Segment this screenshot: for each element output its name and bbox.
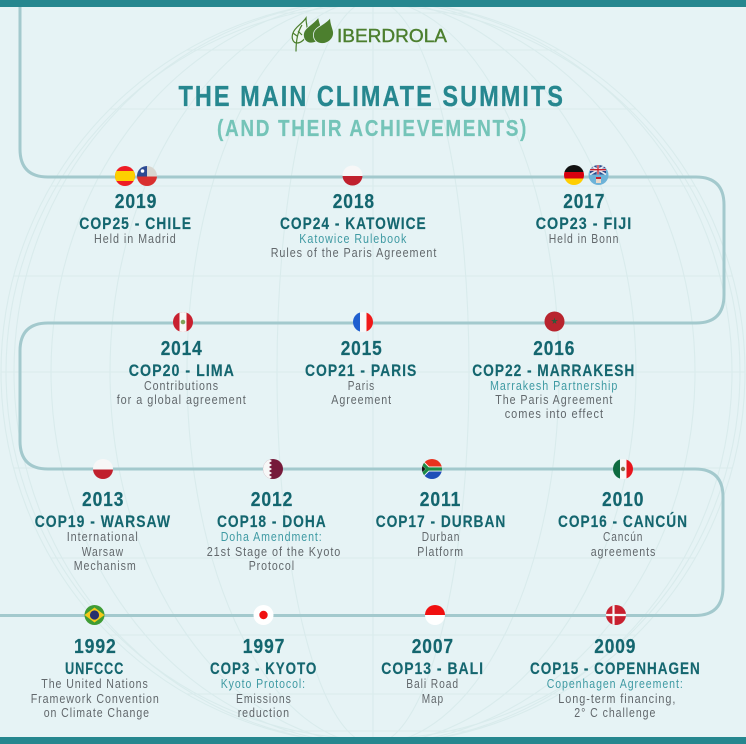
summit: COP19 Warsaw 2013: COP19 - WARSAW: [35, 512, 171, 531]
summit: COP19 Warsaw 2013: 2013: [82, 489, 124, 511]
summit: COP25 Chile 2019: [79, 166, 192, 246]
summit: COP23 Fiji 2017: 2017: [563, 191, 605, 213]
summit: COP19 Warsaw 2013: Warsaw: [82, 545, 124, 559]
summit: COP19 Warsaw 2013: Mechanism: [74, 559, 137, 573]
icon: flag of Morocco: [544, 311, 565, 332]
icon: flags of Germany and Fiji: [564, 165, 609, 186]
summit: UNFCCC 1992: on Climate Change: [44, 706, 150, 720]
summit: COP23 Fiji 2017: COP23 - FIJI: [536, 214, 632, 233]
summit: COP22 Marrakesh 2016: The Paris Agreement: [495, 393, 613, 407]
summit: COP20 Lima 2014: [117, 312, 247, 407]
summit: COP23 Fiji 2017: Held in Bonn: [549, 232, 619, 246]
summit: UNFCCC 1992: UNFCCC: [65, 659, 124, 678]
summit: COP13 Bali 2007: COP13 - BALI: [381, 659, 484, 678]
icon: flag of Indonesia: [425, 605, 445, 625]
summit: COP25 Chile 2019: COP25 - CHILE: [79, 214, 192, 233]
logo: Iberdrola: [292, 17, 448, 52]
summit: COP17 Durban 2011: Platform: [417, 545, 464, 559]
icon: flags of Spain and Chile: [115, 166, 157, 186]
summit: COP18 Doha 2012: 2012: [251, 489, 293, 511]
summit: COP21 Paris 2015: Agreement: [331, 393, 392, 407]
summit: COP24 Katowice 2018: [271, 165, 437, 260]
summit: COP13 Bali 2007: 2007: [412, 636, 454, 658]
summit: COP3 Kyoto 1997: Emissions: [236, 692, 292, 706]
summit: COP13 Bali 2007: Bali Road: [406, 677, 459, 691]
summit: COP22 Marrakesh 2016: COP22 - MARRAKESH: [472, 361, 635, 380]
summit: COP16 Cancun 2010: Cancún: [603, 530, 643, 544]
icon: flag of Japan: [254, 605, 274, 625]
summit: COP15 Copenhagen 2009: COP15 - COPENHAGEN: [530, 659, 701, 678]
summit: COP18 Doha 2012: Doha Amendment:: [221, 530, 323, 544]
summit: COP18 Doha 2012: [207, 459, 341, 573]
summit: COP13 Bali 2007: [381, 605, 484, 706]
summit: COP22 Marrakesh 2016: 2016: [533, 338, 575, 360]
title: THE MAIN CLIMATE SUMMITS: [178, 81, 565, 113]
summit: COP18 Doha 2012: 21st Stage of the Kyoto: [207, 545, 341, 559]
summit: COP15 Copenhagen 2009: Copenhagen Agreement:: [547, 677, 684, 691]
icon: flag of Poland: [93, 459, 113, 480]
summit: COP20 Lima 2014: COP20 - LIMA: [129, 361, 235, 380]
summit: UNFCCC 1992: Framework Convention: [31, 692, 160, 706]
summit: COP15 Copenhagen 2009: Long-term financing,: [558, 692, 676, 706]
summit: COP25 Chile 2019: 2019: [115, 191, 157, 213]
summit: COP17 Durban 2011: COP17 - DURBAN: [376, 512, 506, 531]
summit: COP3 Kyoto 1997: [210, 605, 317, 720]
top bar: [0, 0, 746, 7]
timeline path: [0, 7, 724, 616]
summit: COP17 Durban 2011: Durban: [422, 530, 460, 544]
summit: COP24 Katowice 2018: Rules of the Paris Agreement: [271, 246, 437, 260]
summit: COP22 Marrakesh 2016: comes into effect: [505, 407, 604, 421]
summit: COP18 Doha 2012: Protocol: [249, 559, 295, 573]
summit: COP16 Cancun 2010: COP16 - CANCÚN: [558, 512, 688, 531]
summit: UNFCCC 1992: The United Nations: [41, 677, 149, 691]
icon: flag of France: [353, 312, 374, 332]
summit: COP21 Paris 2015: 2015: [341, 338, 383, 360]
summit: COP20 Lima 2014: Contributions: [144, 379, 219, 393]
summit: COP16 Cancun 2010: [558, 459, 688, 559]
summit: COP17 Durban 2011: [376, 459, 506, 559]
summit: COP13 Bali 2007: Map: [422, 692, 444, 706]
summit: COP15 Copenhagen 2009: 2009: [594, 636, 636, 658]
summit: COP25 Chile 2019: Held in Madrid: [94, 232, 177, 246]
summit: COP3 Kyoto 1997: 1997: [243, 636, 285, 658]
summit: COP21 Paris 2015: Paris: [348, 379, 375, 393]
summit: COP22 Marrakesh 2016: Marrakesh Partnership: [490, 379, 618, 393]
summit: UNFCCC 1992: 1992: [74, 636, 117, 658]
icon: flag of South Africa: [421, 459, 442, 479]
summit: COP21 Paris 2015: COP21 - PARIS: [305, 361, 417, 380]
summit: COP19 Warsaw 2013: [35, 459, 171, 573]
subtitle: (AND THEIR ACHIEVEMENTS): [217, 115, 528, 141]
summit: COP24 Katowice 2018: COP24 - KATOWICE: [280, 214, 427, 233]
summit: COP3 Kyoto 1997: reduction: [238, 706, 290, 720]
summit: UNFCCC 1992: [31, 605, 160, 720]
summit: COP18 Doha 2012: COP18 - DOHA: [217, 512, 327, 531]
logo: Iberdrola: IBERDROLA: [337, 25, 448, 46]
summit: COP21 Paris 2015: [305, 312, 417, 407]
summit: COP24 Katowice 2018: 2018: [333, 191, 375, 213]
summit: COP16 Cancun 2010: 2010: [602, 489, 644, 511]
icon: flag of Brazil: [84, 605, 105, 625]
summit: COP20 Lima 2014: 2014: [161, 338, 203, 360]
summit: COP16 Cancun 2010: agreements: [591, 545, 656, 559]
icon: flag of Qatar: [263, 459, 283, 479]
icon: flag of Peru: [173, 312, 193, 332]
icon: flag of Mexico: [613, 459, 634, 479]
summit: COP22 Marrakesh 2016: [472, 311, 635, 421]
summit: COP23 Fiji 2017: [536, 165, 632, 246]
icon: flag of Denmark: [606, 605, 626, 625]
summit: COP17 Durban 2011: 2011: [420, 489, 461, 511]
summit: COP19 Warsaw 2013: International: [67, 530, 139, 544]
summit: COP20 Lima 2014: for a global agreement: [117, 393, 247, 407]
summit: COP3 Kyoto 1997: Kyoto Protocol:: [221, 677, 306, 691]
bottom bar: [0, 737, 746, 744]
summit: COP15 Copenhagen 2009: 2° C challenge: [574, 706, 656, 720]
icon: flag of Poland: [342, 165, 363, 186]
summit: COP24 Katowice 2018: Katowice Rulebook: [299, 232, 407, 246]
summit: COP15 Copenhagen 2009: [530, 605, 701, 720]
summit: COP3 Kyoto 1997: COP3 - KYOTO: [210, 659, 317, 678]
